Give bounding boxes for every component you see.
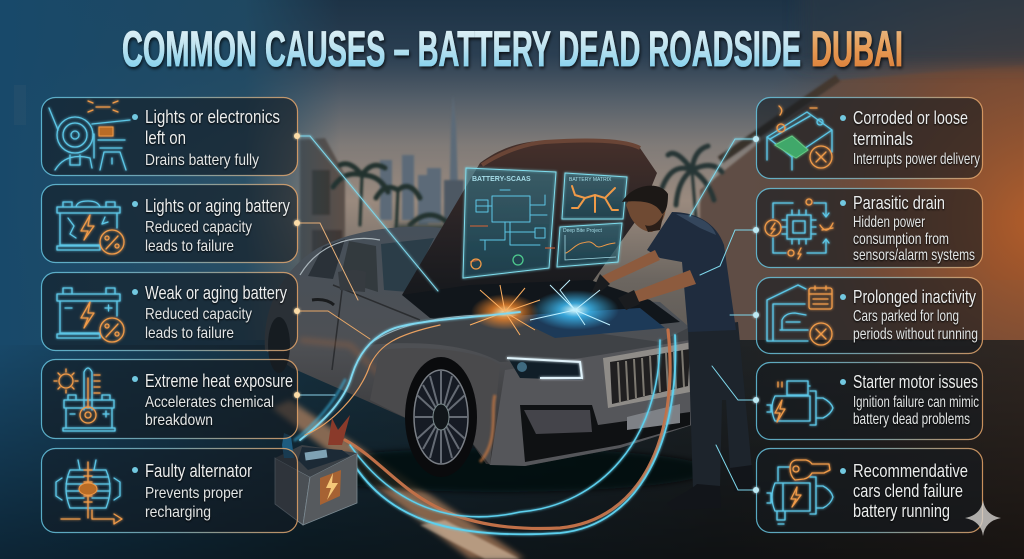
panel text: Parasitic drain xyxy=(853,193,945,213)
panel text: Weak or aging battery xyxy=(145,283,287,303)
battery in bay xyxy=(510,308,665,338)
left blue tint and building xyxy=(0,0,340,345)
bolt panel xyxy=(320,470,341,505)
palm tree right xyxy=(662,146,722,232)
front wheel xyxy=(405,357,477,477)
hood and fender surface xyxy=(368,316,692,362)
skyline: Burj and towers xyxy=(380,95,464,225)
windshield xyxy=(381,238,434,292)
grille xyxy=(603,342,692,408)
panel text: Prevents proper xyxy=(145,485,244,502)
panel text: terminals xyxy=(853,129,913,149)
panel text: Reduced capacity xyxy=(145,219,252,236)
mechanic xyxy=(590,186,755,510)
icon: sparkle watermark xyxy=(965,500,1001,536)
rear wheel xyxy=(268,317,290,373)
lower intake xyxy=(520,405,690,462)
bullet xyxy=(132,376,138,382)
arm left xyxy=(598,250,660,286)
car xyxy=(265,140,692,477)
icon: heat and battery xyxy=(54,368,115,431)
panel text: Recommendative xyxy=(853,461,968,481)
control panel xyxy=(298,447,350,470)
bullet xyxy=(840,468,846,474)
front bumper xyxy=(490,340,692,466)
panel text: battery dead problems xyxy=(853,411,970,428)
panel text: Faulty alternator xyxy=(145,461,252,481)
door lines and mirror xyxy=(332,285,420,370)
bullet xyxy=(132,289,138,295)
panel: prolonged inactivity xyxy=(753,278,982,354)
panel: recommendative xyxy=(753,448,982,532)
license plate xyxy=(627,404,680,430)
screen: battery scan: BATTERY-SCAAS xyxy=(472,176,531,183)
panel: parasitic drain xyxy=(753,188,982,268)
holographic screens xyxy=(463,168,627,278)
panel: corroded or loose terminals xyxy=(753,98,982,178)
blue spark xyxy=(530,280,619,330)
panel text: Hidden power xyxy=(853,214,925,231)
bullet xyxy=(840,115,846,121)
screen: line graph: Deep Bite Project xyxy=(563,228,603,234)
fender lower shade xyxy=(370,348,500,465)
panel text: Reduced capacity xyxy=(145,306,252,323)
panel text: Drains battery fully xyxy=(145,152,259,169)
palm trees center xyxy=(333,164,450,235)
panel text xyxy=(145,461,252,521)
sparks on battery xyxy=(470,280,619,335)
panel: starter motor issues xyxy=(753,362,982,440)
panel text: periods without running xyxy=(853,326,978,343)
panel text: leads to failure xyxy=(145,238,234,255)
icon: key and starter motor xyxy=(767,460,833,524)
panel text: Prolonged inactivity xyxy=(853,287,976,307)
bullet xyxy=(840,200,846,206)
orange spark xyxy=(470,285,540,335)
jump starter xyxy=(275,415,357,525)
icon: starter motor xyxy=(767,381,833,425)
icon: car dashboard xyxy=(49,101,130,170)
screen: line graph xyxy=(557,223,622,267)
panel text: left on xyxy=(145,128,186,148)
panel text xyxy=(145,107,280,169)
connector lines xyxy=(297,136,756,490)
ground xyxy=(0,340,1024,559)
panel text: sensors/alarm systems xyxy=(853,247,975,264)
panel text: cars clend failure xyxy=(853,481,963,501)
panel text xyxy=(145,196,290,255)
panel: faulty alternator xyxy=(42,448,298,532)
open hood xyxy=(402,140,657,300)
arm right xyxy=(628,270,696,304)
panel: lights or aging battery xyxy=(42,184,300,262)
engine bay xyxy=(402,280,680,335)
roof edge highlight xyxy=(300,238,380,275)
panel text xyxy=(853,461,968,521)
panel text xyxy=(853,108,980,168)
bullet xyxy=(132,201,138,207)
panel: extreme heat exposure xyxy=(42,360,300,438)
icon: corroded terminals xyxy=(767,106,832,170)
panel text: Ignition failure can mimic xyxy=(853,394,979,411)
panel text xyxy=(145,371,293,429)
panel text: Lights or aging battery xyxy=(145,196,290,216)
panel text: leads to failure xyxy=(145,325,234,342)
panel text xyxy=(853,372,979,428)
panel text: Starter motor issues xyxy=(853,372,978,392)
headlight xyxy=(507,358,582,380)
panel text: Corroded or loose xyxy=(853,108,968,128)
blue clamps xyxy=(282,433,294,458)
panel text xyxy=(853,287,978,343)
panel text: battery running xyxy=(853,501,950,521)
car body xyxy=(265,227,692,466)
torso xyxy=(647,212,736,332)
screen: battery scan xyxy=(463,168,556,278)
panel: lights or electronics left on xyxy=(42,98,300,176)
bullet xyxy=(132,467,138,473)
screen: wiring: BATTERY MATRIX xyxy=(569,177,612,183)
panel text: Accelerates chemical xyxy=(145,394,274,411)
head xyxy=(626,192,666,232)
panel text: Cars parked for long xyxy=(853,308,959,325)
icon: weak battery xyxy=(57,288,124,342)
panel text: Lights or electronics xyxy=(145,107,280,127)
starter case left face xyxy=(275,458,310,525)
jump cables xyxy=(295,312,675,534)
starter case right face xyxy=(303,453,357,525)
right building xyxy=(700,65,1024,350)
panel text xyxy=(145,283,287,342)
gloves xyxy=(590,274,610,296)
panel text: Interrupts power delivery xyxy=(853,151,980,168)
panel text: recharging xyxy=(145,504,211,521)
panel text: breakdown xyxy=(145,412,213,429)
panel: weak or aging battery xyxy=(42,272,300,350)
icon: cracked battery xyxy=(57,201,124,254)
mid building left xyxy=(300,138,345,300)
side windows xyxy=(308,239,345,279)
boot xyxy=(667,484,721,510)
panel text: Extreme heat exposure xyxy=(145,371,293,391)
icon: chip with drain loop xyxy=(765,199,833,259)
case top xyxy=(275,445,357,477)
panel text xyxy=(853,193,975,264)
icon: alternator xyxy=(56,460,122,524)
legs xyxy=(688,322,752,490)
light streak on road xyxy=(272,400,525,559)
title: DUBAI xyxy=(811,21,903,77)
bullet xyxy=(132,114,138,120)
red clamps xyxy=(328,415,350,445)
bullet xyxy=(840,294,846,300)
icon: garage with calendar and car xyxy=(767,285,832,345)
panel text: consumption from xyxy=(853,231,949,248)
screen: wiring xyxy=(562,173,627,219)
bullet xyxy=(840,379,846,385)
